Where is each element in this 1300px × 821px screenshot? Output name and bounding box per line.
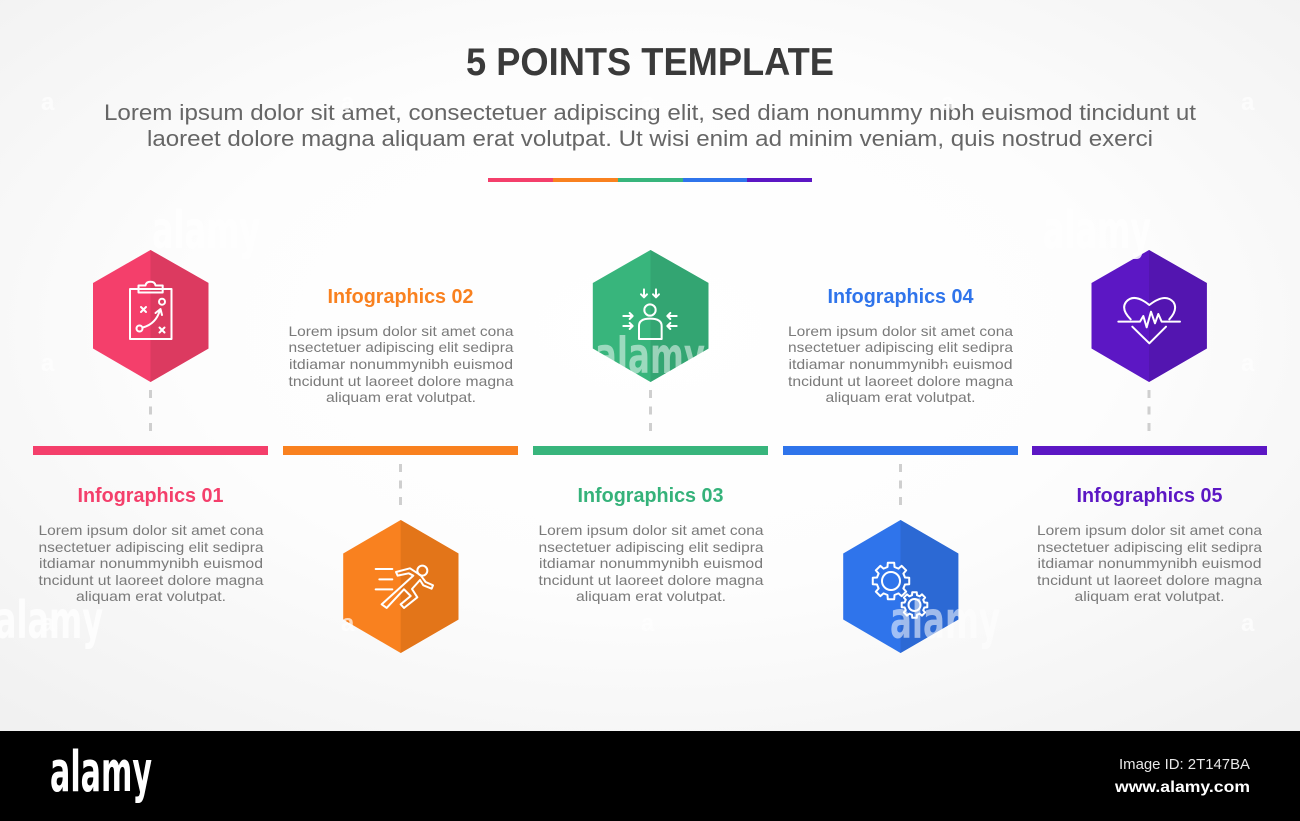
body text 3: tncidunt ut laoreet dolore magna: [538, 572, 764, 588]
watermarks: alamy: [0, 591, 103, 651]
body text 1: aliquam erat volutpat.: [76, 588, 226, 604]
body text 3: Lorem ipsum dolor sit amet cona: [538, 522, 764, 538]
watermarks: a: [341, 89, 355, 116]
watermarks: a: [41, 89, 55, 116]
watermarks: a: [1241, 610, 1255, 637]
body text 4: itdiamar nonummynibh euismod: [788, 356, 1012, 372]
footer band: [0, 731, 1300, 821]
body text 5: Lorem ipsum dolor sit amet cona: [1037, 522, 1262, 538]
body text 3: [538, 522, 764, 604]
watermarks: a: [941, 89, 955, 116]
bar 4: [783, 446, 1018, 455]
connector 3: [649, 390, 652, 432]
body text 5: nsectetuer adipiscing elit sedipra: [1037, 539, 1262, 555]
body text 1: itdiamar nonummynibh euismod: [39, 555, 263, 571]
point 5: [1032, 250, 1267, 604]
body text 1: Lorem ipsum dolor sit amet cona: [38, 522, 264, 538]
watermarks: alamy: [890, 591, 1000, 651]
body text 5: [1037, 522, 1262, 604]
point 3: [533, 250, 768, 604]
watermarks: a: [1241, 350, 1255, 377]
body text 4: tncidunt ut laoreet dolore magna: [788, 373, 1013, 389]
watermarks: a: [341, 610, 355, 637]
hexagon 2: [343, 520, 458, 653]
body text 4: aliquam erat volutpat.: [826, 389, 976, 405]
title: 5 POINTS TEMPLATE: [466, 41, 834, 84]
body text 2: tncidunt ut laoreet dolore magna: [288, 373, 514, 389]
body text 1: nsectetuer adipiscing elit sedipra: [38, 539, 264, 555]
heading 4: Infographics 04: [828, 286, 974, 308]
bar 3: [533, 446, 768, 455]
watermarks: a: [41, 350, 55, 377]
body text 5: aliquam erat volutpat.: [1074, 588, 1224, 604]
watermarks: a: [941, 350, 955, 377]
point 1: [33, 250, 268, 604]
connector 5: [1148, 390, 1150, 432]
watermarks: a: [641, 89, 655, 116]
heading 3: Infographics 03: [578, 485, 724, 507]
watermarks: alamy: [1043, 201, 1151, 261]
watermarks: a: [641, 610, 655, 637]
website: www.alamy.com: [1114, 779, 1250, 796]
connector 1: [149, 390, 152, 432]
body text 4: Lorem ipsum dolor sit amet cona: [788, 323, 1013, 339]
body text 2: itdiamar nonummynibh euismod: [289, 356, 513, 372]
subtitle text block: laoreet dolore magna aliquam erat volutpat. Ut wisi enim ad minim veniam, quis nostrud exerci: [147, 126, 1153, 151]
hexagon 3: [593, 250, 708, 382]
bar 2: [283, 446, 518, 455]
body text 5: tncidunt ut laoreet dolore magna: [1037, 572, 1262, 588]
icon: clipboard strategy: [130, 282, 172, 339]
subtitle text block: Lorem ipsum dolor sit amet, consectetuer adipiscing elit, sed diam nonummy nibh euismod tincidunt ut: [104, 100, 1196, 125]
heading 2: Infographics 02: [328, 286, 474, 308]
body text 4: [788, 323, 1013, 405]
body text 3: nsectetuer adipiscing elit sedipra: [538, 539, 764, 555]
heading 5: Infographics 05: [1076, 485, 1222, 507]
body text 5: itdiamar nonummynibh euismod: [1038, 555, 1262, 571]
body text 2: nsectetuer adipiscing elit sedipra: [288, 339, 514, 355]
body text 2: [288, 323, 514, 405]
watermarks: a: [41, 610, 55, 637]
icon: heart with pulse: [1118, 298, 1180, 343]
body text 2: aliquam erat volutpat.: [326, 389, 476, 405]
heading 1: Infographics 01: [78, 485, 224, 507]
body text 3: aliquam erat volutpat.: [576, 588, 726, 604]
watermarks: [0, 89, 1255, 651]
icon: person with arrows: [623, 289, 677, 339]
body text 1: tncidunt ut laoreet dolore magna: [38, 572, 264, 588]
hexagon 5: [1092, 250, 1207, 382]
watermarks: alamy: [595, 327, 705, 385]
icon: gears: [873, 563, 927, 618]
footer logo: alamy: [50, 740, 152, 805]
multicolour divider: [488, 178, 812, 182]
connector 2: [399, 464, 402, 506]
subtitle text block: [104, 100, 1196, 151]
watermarks: a: [1241, 89, 1255, 116]
watermarks: alamy: [152, 201, 260, 261]
image id: Image ID: 2T147BA: [1119, 756, 1250, 773]
connector 4: [899, 464, 902, 506]
bar 1: [33, 446, 268, 455]
icon: running person: [376, 566, 433, 608]
point 4: [783, 286, 1018, 653]
body text 3: itdiamar nonummynibh euismod: [539, 555, 763, 571]
hexagon 4: [843, 520, 958, 653]
point 2: [283, 286, 518, 653]
body text 4: nsectetuer adipiscing elit sedipra: [788, 339, 1013, 355]
bar 5: [1032, 446, 1267, 455]
hexagon 1: [93, 250, 208, 382]
body text 2: Lorem ipsum dolor sit amet cona: [288, 323, 514, 339]
body text 1: [38, 522, 264, 604]
